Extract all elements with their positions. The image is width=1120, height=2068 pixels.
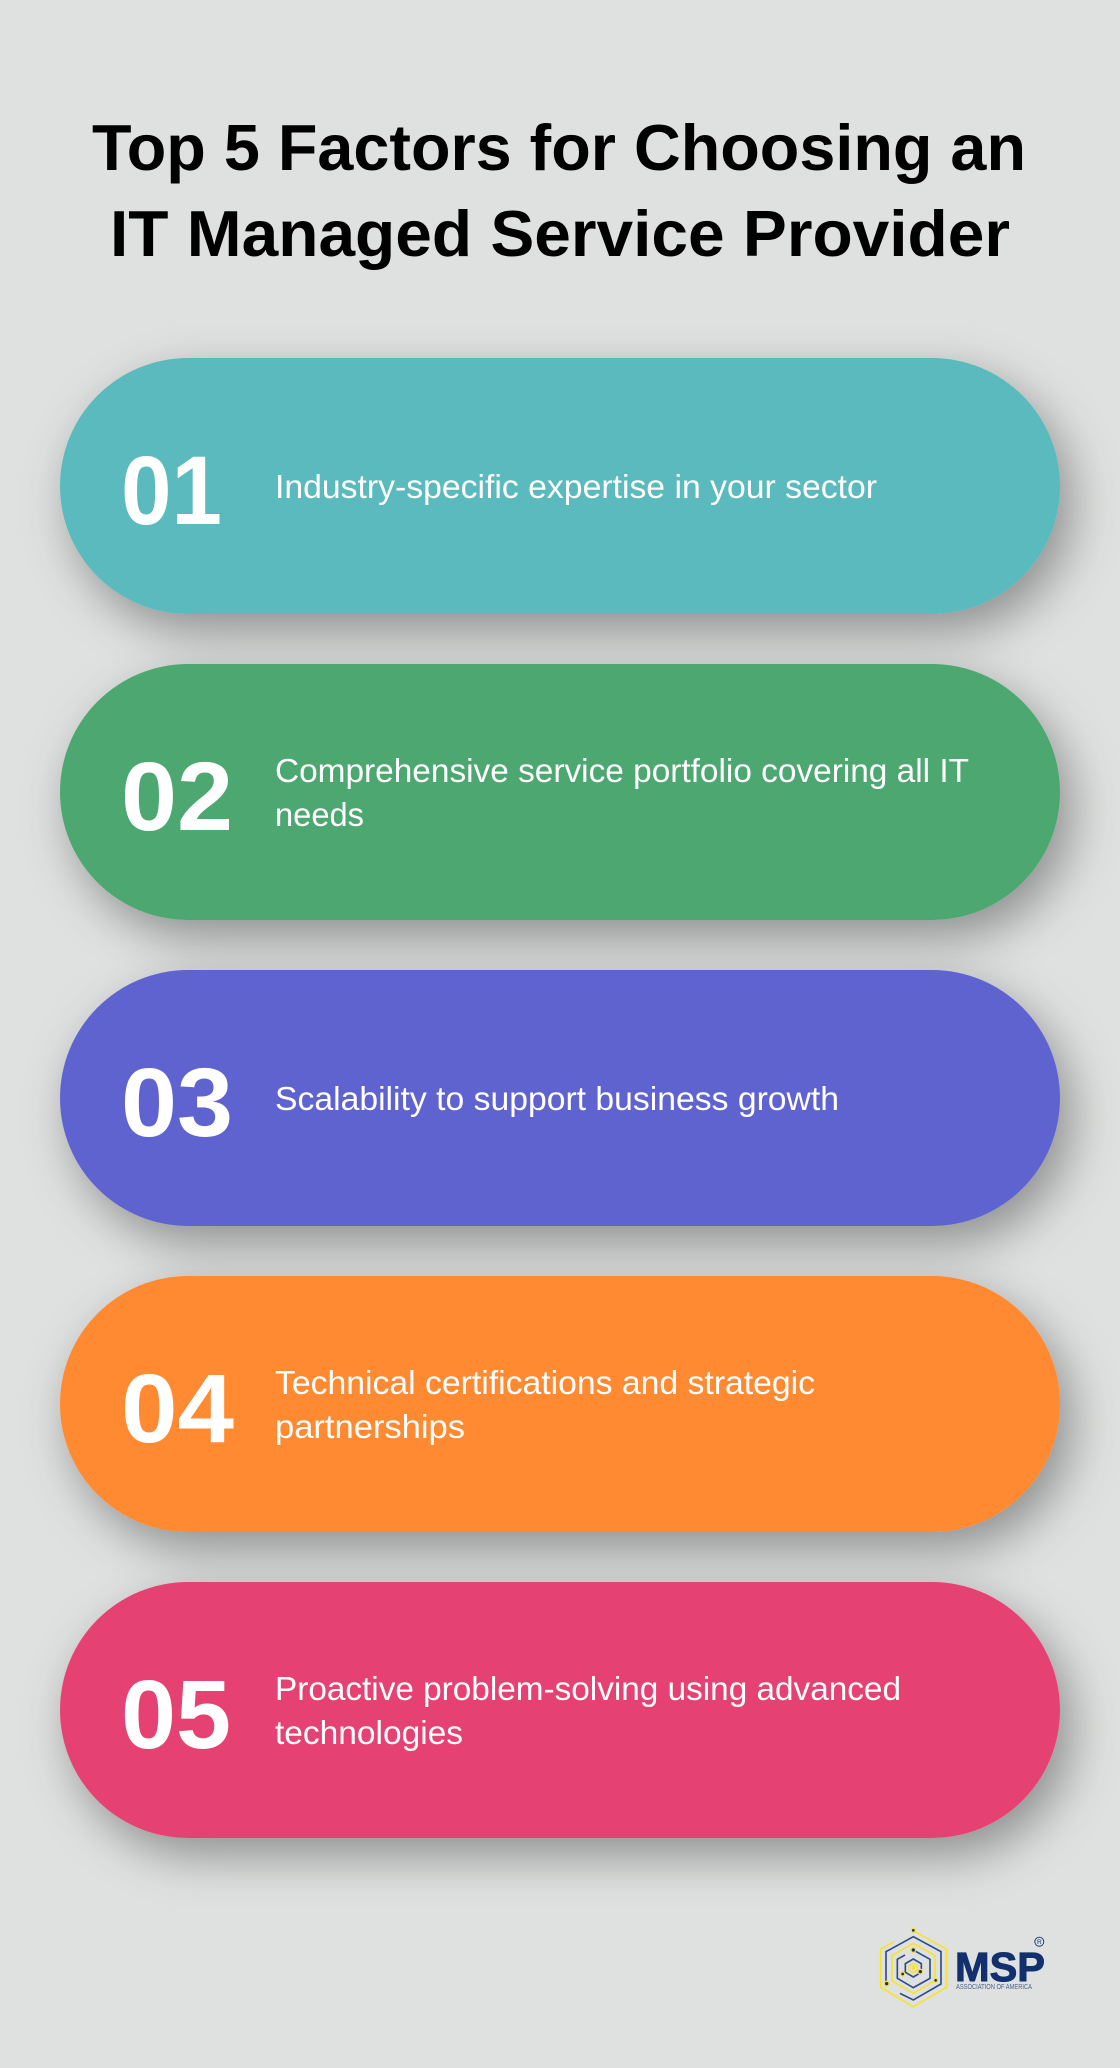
text: factor 03: Scalability to support business growth <box>275 1080 839 1117</box>
number 02: 02 <box>121 742 233 851</box>
pill background teal <box>60 358 1060 614</box>
text: factor 02 <box>275 752 969 833</box>
text: factor 01: Industry-specific expertise in your sector <box>275 468 877 505</box>
text: factor 05 <box>275 1670 901 1751</box>
tagline: ASSOCIATION OF AMERICA <box>956 1984 1032 1991</box>
panel: factor 03 <box>60 970 1060 1226</box>
text: factor 04 <box>275 1364 815 1445</box>
number 04: 04 <box>121 1354 234 1463</box>
number 01: 01 <box>121 436 222 545</box>
panel: factor 02 <box>60 664 1060 920</box>
text: factor 02: Comprehensive service portfolio covering all IT <box>275 752 969 789</box>
pill background orange <box>60 1276 1060 1532</box>
icon: hexagon circuit mark <box>881 1928 947 2007</box>
panel: factor 04 <box>60 1276 1060 1532</box>
title: Top 5 Factors for Choosing an <box>92 111 1026 184</box>
title <box>92 111 1026 270</box>
text: factor 05: technologies <box>275 1714 463 1751</box>
registered mark <box>1035 1937 1044 1946</box>
registered mark: R <box>1037 1939 1042 1946</box>
text: factor 05: Proactive problem-solving using advanced <box>275 1670 901 1707</box>
text: factor 02: needs <box>275 796 364 833</box>
title: IT Managed Service Provider <box>110 197 1010 270</box>
wordmark MSP: MSP <box>955 1944 1045 1990</box>
logo: MSP Association of America <box>881 1928 1045 2007</box>
text: factor 04: Technical certifications and strategic <box>275 1364 815 1401</box>
text: factor 04: partnerships <box>275 1408 465 1445</box>
number 03: 03 <box>121 1048 233 1157</box>
number 05: 05 <box>121 1660 231 1769</box>
panel: factor 01 <box>60 358 1060 614</box>
pill background indigo <box>60 970 1060 1226</box>
pill background green <box>60 664 1060 920</box>
panel: factor 05 <box>60 1582 1060 1838</box>
pill background pink <box>60 1582 1060 1838</box>
